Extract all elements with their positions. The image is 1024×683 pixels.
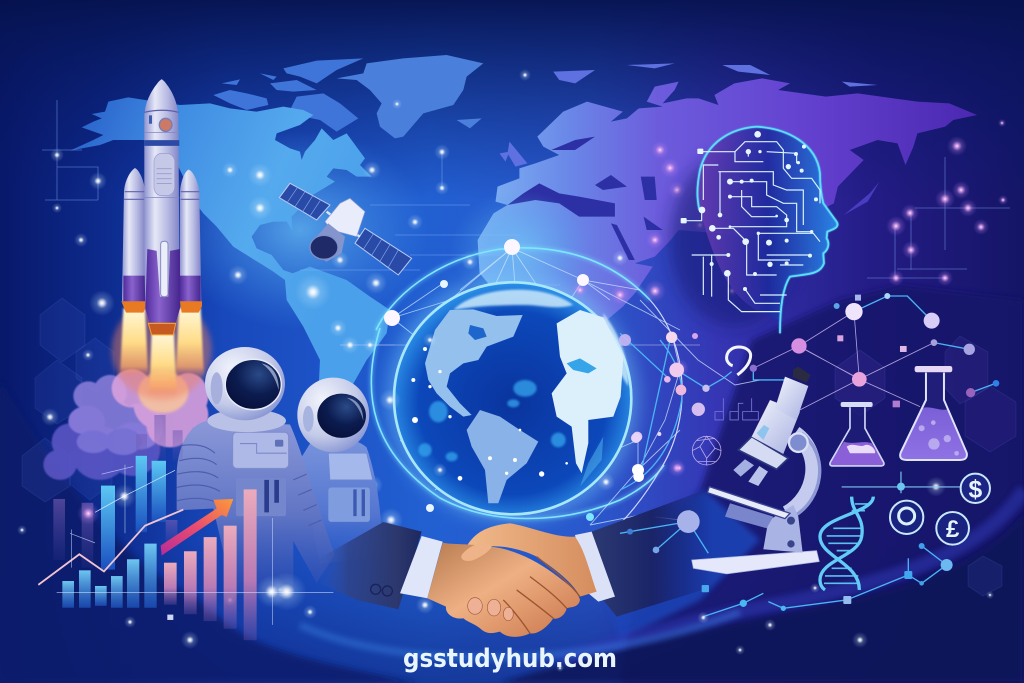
head silhouette	[698, 127, 838, 333]
objectives	[733, 459, 754, 477]
right cuff	[575, 532, 615, 602]
helmet	[205, 347, 285, 420]
handshake	[317, 487, 713, 637]
dollar coin: $	[968, 476, 982, 503]
faded bars	[53, 415, 183, 568]
right solar panel	[355, 228, 412, 275]
stage	[707, 487, 790, 519]
eyepiece	[775, 377, 808, 420]
network nodes	[627, 293, 999, 624]
continents	[425, 309, 623, 503]
arctic islands	[213, 58, 363, 132]
map: blue band under microscope	[585, 490, 760, 640]
main stage	[144, 79, 180, 335]
map: lower centre arcs	[300, 612, 740, 657]
satellite body	[325, 198, 365, 237]
finance icons	[842, 472, 990, 545]
data glyph icon	[715, 398, 758, 420]
front hand	[427, 543, 580, 637]
inland seas	[507, 137, 663, 260]
north and south america mainland	[70, 97, 390, 413]
rocket	[112, 79, 212, 400]
nosepiece	[738, 437, 788, 469]
molecule icon	[692, 436, 721, 465]
smoke: pink clouds	[112, 369, 208, 447]
ocean highlights	[418, 380, 566, 461]
circuit nodes	[681, 131, 818, 291]
DNA strands	[820, 497, 873, 590]
flasks	[830, 366, 967, 466]
main landmass	[478, 78, 977, 327]
small flask	[830, 402, 884, 466]
back hand	[462, 523, 597, 597]
thumb	[461, 543, 492, 561]
connector	[842, 472, 960, 493]
orbit rings	[371, 248, 664, 519]
map: eurasia and africa	[478, 63, 977, 327]
right booster	[180, 170, 202, 313]
trend line	[38, 510, 183, 585]
blue bars	[62, 544, 157, 608]
rocket flames	[120, 308, 204, 396]
network links	[753, 312, 934, 412]
pound coin: £	[946, 516, 960, 543]
head outline	[697, 127, 838, 333]
arm	[787, 433, 813, 513]
science network	[620, 293, 999, 624]
blue links	[620, 296, 996, 617]
pound coin	[936, 512, 969, 545]
left sleeve	[317, 522, 422, 609]
pink bars	[164, 489, 257, 640]
tall blue bars	[101, 456, 166, 570]
back astronaut body	[302, 438, 383, 564]
target coin	[890, 501, 923, 534]
network bright nodes	[384, 239, 644, 521]
satellite booms	[327, 212, 360, 237]
head shadow	[670, 153, 797, 327]
base	[692, 551, 819, 574]
map: bottom right dark	[500, 513, 1024, 683]
circuit grid lines	[42, 100, 1010, 345]
large flask	[900, 366, 967, 460]
greenland	[337, 55, 483, 138]
left booster	[121, 168, 145, 313]
DNA helix	[820, 497, 873, 590]
red arrow	[161, 499, 233, 555]
arctic and british islands	[500, 63, 880, 215]
map: the Americas	[70, 55, 483, 413]
globe city lights	[411, 347, 568, 481]
light glow over africa	[450, 190, 590, 310]
globe	[387, 274, 639, 522]
globe ocean	[394, 282, 631, 514]
back helmet	[297, 378, 369, 452]
chest pack	[233, 432, 289, 516]
back visor	[317, 394, 366, 438]
visor	[225, 359, 281, 410]
lens flares	[267, 573, 307, 611]
horseshoe symbol	[727, 347, 751, 375]
right sleeve	[592, 487, 713, 617]
map: darkened lower right region	[620, 285, 1024, 683]
flame glow	[112, 300, 212, 400]
back chest pack	[328, 453, 373, 522]
post	[763, 505, 803, 553]
hexagon pattern	[22, 298, 1016, 596]
dollar coin	[961, 474, 990, 503]
rocket smoke	[43, 369, 208, 480]
left solar panel	[279, 183, 330, 220]
growth chart	[38, 415, 333, 640]
map: bottom left dark swoosh	[0, 380, 418, 683]
smoke: mid lilac clouds	[68, 375, 163, 455]
astronaut front	[177, 347, 335, 594]
DNA rungs	[824, 504, 868, 583]
arm stripes	[177, 445, 322, 526]
front astronaut body	[177, 421, 335, 594]
circuit traces	[683, 142, 820, 312]
collar	[207, 409, 286, 432]
network links	[392, 248, 760, 525]
AI head	[670, 127, 838, 333]
globe network	[340, 248, 760, 545]
site url text: gsstudyhub.com	[403, 644, 617, 674]
tube body	[752, 400, 800, 454]
left cuff	[400, 536, 443, 598]
baseline	[57, 518, 333, 625]
iceland	[457, 118, 482, 128]
astronaut back	[297, 378, 383, 564]
atmosphere clouds	[453, 290, 628, 387]
finger lines and nails	[503, 557, 580, 633]
map: lighter arc right	[560, 490, 1024, 660]
microscope	[692, 367, 820, 574]
satellite	[279, 183, 412, 275]
knob	[789, 433, 808, 452]
globe halo	[387, 274, 639, 522]
smoke: lower purple clouds	[43, 405, 160, 480]
